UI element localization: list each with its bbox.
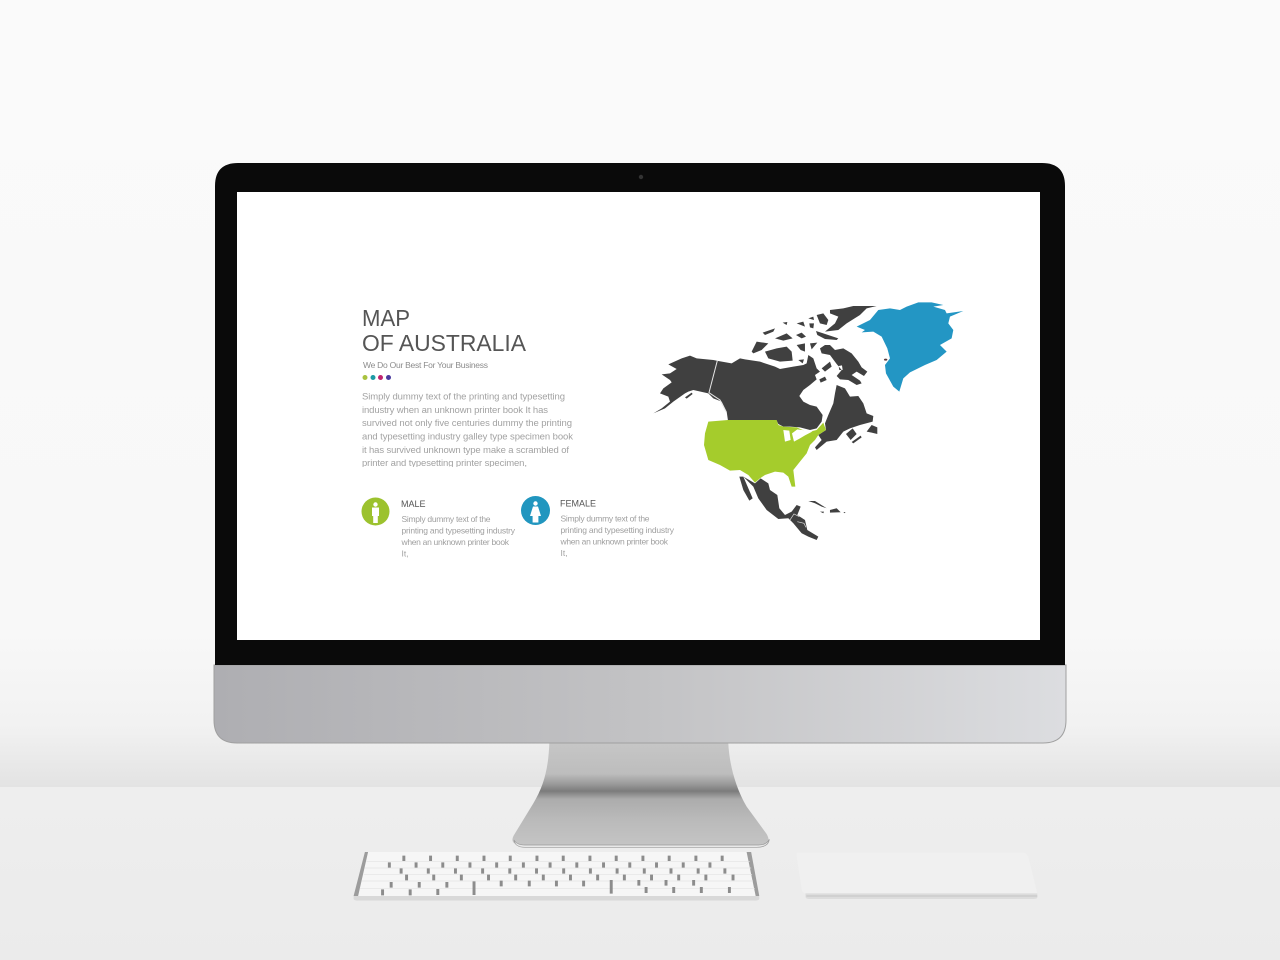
Alaska border and lines [709, 361, 726, 412]
keyboard key gaps [383, 856, 733, 895]
title line two: OF AUSTRALIA [362, 330, 526, 356]
Mexico and Central America [739, 477, 845, 540]
icon: male [362, 498, 390, 526]
female text: Simply dummy text of the [560, 514, 650, 524]
map of North America [653, 302, 963, 540]
trackpad [796, 853, 1037, 899]
body paragraph: and typesetting industry galley type specimen book [362, 432, 573, 442]
desk surface [0, 787, 1280, 960]
body paragraph [362, 392, 573, 469]
female text: printing and typesetting industry [560, 525, 675, 535]
monitor [214, 163, 1066, 743]
icon: female [521, 496, 550, 525]
keyboard [353, 852, 759, 901]
keyboard row lines [360, 862, 755, 888]
female text: when an unknown printer book [560, 536, 669, 546]
body paragraph: survived not only five centuries dummy the printing [362, 418, 572, 429]
male text [400, 514, 516, 558]
body paragraph: it has survived unknown type make a scrambled of [362, 445, 569, 456]
female block [521, 496, 675, 558]
body paragraph: industry when an unknown printer book It has [362, 405, 548, 416]
male text: Simply dummy text of the [402, 514, 491, 524]
Greenland [857, 302, 963, 392]
monitor chin [214, 665, 1066, 743]
monitor stand [512, 743, 769, 847]
male text: It, [402, 548, 409, 558]
female text [560, 514, 675, 558]
subtitle: We Do Our Best For Your Business [363, 360, 488, 370]
body paragraph: printer and typesetting printer specimen, [362, 458, 527, 469]
male text: printing and typesetting industry [402, 526, 516, 536]
United States [704, 420, 826, 487]
male block [362, 498, 516, 558]
female text: It, [560, 548, 568, 558]
body paragraph: Simply dummy text of the printing and typesetting [362, 392, 565, 402]
female label: FEMALE [560, 498, 596, 508]
webcam [639, 175, 643, 179]
colour dots [362, 375, 391, 380]
monitor bezel [215, 163, 1065, 665]
title: MAP [362, 305, 410, 331]
Central America borders [790, 514, 806, 527]
Great Lakes [783, 429, 813, 442]
Iceland marker [884, 359, 887, 361]
Canada and Alaska [653, 306, 877, 450]
male label: MALE [401, 499, 426, 509]
slide screen [237, 192, 1040, 640]
male text: when an unknown printer book [400, 537, 510, 547]
